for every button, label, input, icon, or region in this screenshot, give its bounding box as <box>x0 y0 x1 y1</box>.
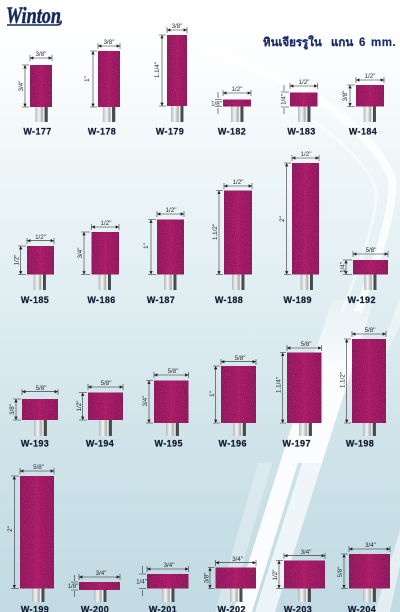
product W-204: 5/8" <box>337 567 344 577</box>
product W-189 <box>279 151 319 305</box>
product W-198: 1.1/2" <box>340 372 346 388</box>
product W-202: 3/8" <box>204 573 210 583</box>
product W-177: 3/4" <box>18 81 25 91</box>
product W-177 <box>18 51 52 136</box>
product W-177: 3/8" <box>36 51 46 58</box>
product W-194 <box>76 380 123 448</box>
product W-186 <box>77 220 119 305</box>
product W-204: 3/4" <box>365 542 376 549</box>
product W-182 <box>211 86 251 136</box>
product W-194: 1/2" <box>76 401 83 411</box>
product W-202: 3/4" <box>232 556 243 563</box>
product W-187: 1" <box>143 243 150 249</box>
product W-197: W-197 <box>283 438 311 448</box>
product W-184: 3/8" <box>342 91 349 101</box>
product W-194: 5/8" <box>101 380 111 387</box>
product W-186: 3/4" <box>77 248 84 258</box>
product W-200 <box>68 570 120 612</box>
product W-203: 1/2" <box>272 570 279 580</box>
product W-187: W-187 <box>147 295 175 305</box>
title: หินเจียรรูใน <box>263 35 322 50</box>
product W-182: 1/8" <box>211 100 222 108</box>
product W-192: 5/8" <box>366 247 376 254</box>
product W-183: W-183 <box>287 126 316 136</box>
product W-178: W-178 <box>88 126 116 136</box>
product W-196: W-196 <box>219 438 247 448</box>
product W-179 <box>154 23 187 136</box>
product W-204 <box>337 542 390 612</box>
product W-195: 3/4" <box>142 396 149 406</box>
product W-195: 5/8" <box>168 368 178 375</box>
product W-195 <box>142 368 188 448</box>
product W-193: W-193 <box>21 438 49 448</box>
product W-189: 2" <box>279 216 286 222</box>
product W-184 <box>342 73 384 136</box>
product W-200: 1/8" <box>68 583 78 590</box>
product W-197: 5/8" <box>301 341 311 348</box>
product W-185: 1/2" <box>35 234 46 241</box>
product W-197: 1.1/4" <box>276 377 282 393</box>
title: 6 <box>359 37 365 49</box>
product W-195: W-195 <box>155 438 183 448</box>
product W-196: 5/8" <box>235 355 245 362</box>
product W-178: 1" <box>84 76 91 82</box>
product W-186: 1/2" <box>101 220 111 227</box>
product W-179: W-179 <box>156 126 184 136</box>
product W-179: 3/8" <box>172 23 182 30</box>
product W-183: 1/4" <box>280 94 288 105</box>
product W-184: W-184 <box>349 126 377 136</box>
product W-186: W-186 <box>87 295 116 305</box>
product W-178 <box>84 39 120 136</box>
product W-193: 3/8" <box>9 404 16 415</box>
product W-177: W-177 <box>23 126 52 136</box>
product W-178: 3/8" <box>104 39 114 46</box>
title: mm. <box>371 37 396 49</box>
product W-197 <box>276 341 322 448</box>
product W-188: 1.1/2" <box>212 224 219 240</box>
product W-193 <box>9 385 58 448</box>
product W-199: 2" <box>7 526 14 532</box>
logo: Winton: Winton <box>6 3 61 28</box>
product W-189: 1/2" <box>301 151 311 158</box>
product W-202 <box>204 556 256 612</box>
product W-198: 5/8" <box>365 327 375 334</box>
product W-188: W-188 <box>215 295 243 305</box>
product W-189: W-189 <box>284 295 312 305</box>
product W-192: W-192 <box>348 295 376 305</box>
product W-192: 1/4" <box>340 262 347 273</box>
title: แกน <box>331 37 353 49</box>
product W-187 <box>143 207 184 305</box>
product W-184: 1/2" <box>365 73 375 80</box>
product W-182: 1/2" <box>232 86 242 93</box>
product W-199 <box>7 464 54 612</box>
product W-203 <box>272 549 325 612</box>
product W-193: 5/8" <box>36 385 46 392</box>
product W-192 <box>340 247 388 305</box>
product W-185: 1/2" <box>14 255 20 265</box>
product W-201: 3/4" <box>164 562 174 569</box>
product W-198 <box>340 327 386 448</box>
product W-203: 3/4" <box>301 549 311 556</box>
product W-201: 1/4" <box>136 578 147 586</box>
product W-185: W-185 <box>21 295 49 305</box>
product W-196: 1" <box>209 391 216 397</box>
product W-196 <box>209 355 256 448</box>
product W-183: 1/2" <box>299 79 309 86</box>
product W-194: W-194 <box>86 438 114 448</box>
product W-183 <box>280 79 318 136</box>
product W-188: 1/2" <box>233 179 243 186</box>
product W-182: W-182 <box>218 126 246 136</box>
product W-200: 3/4" <box>96 570 106 577</box>
product W-199: 5/8" <box>33 464 44 471</box>
product W-187: 1/2" <box>166 207 176 214</box>
product W-185 <box>14 234 54 305</box>
product W-198: W-198 <box>346 438 374 448</box>
product W-201 <box>136 562 188 612</box>
product W-179: 1.1/4" <box>154 62 161 78</box>
product W-188 <box>212 179 252 305</box>
